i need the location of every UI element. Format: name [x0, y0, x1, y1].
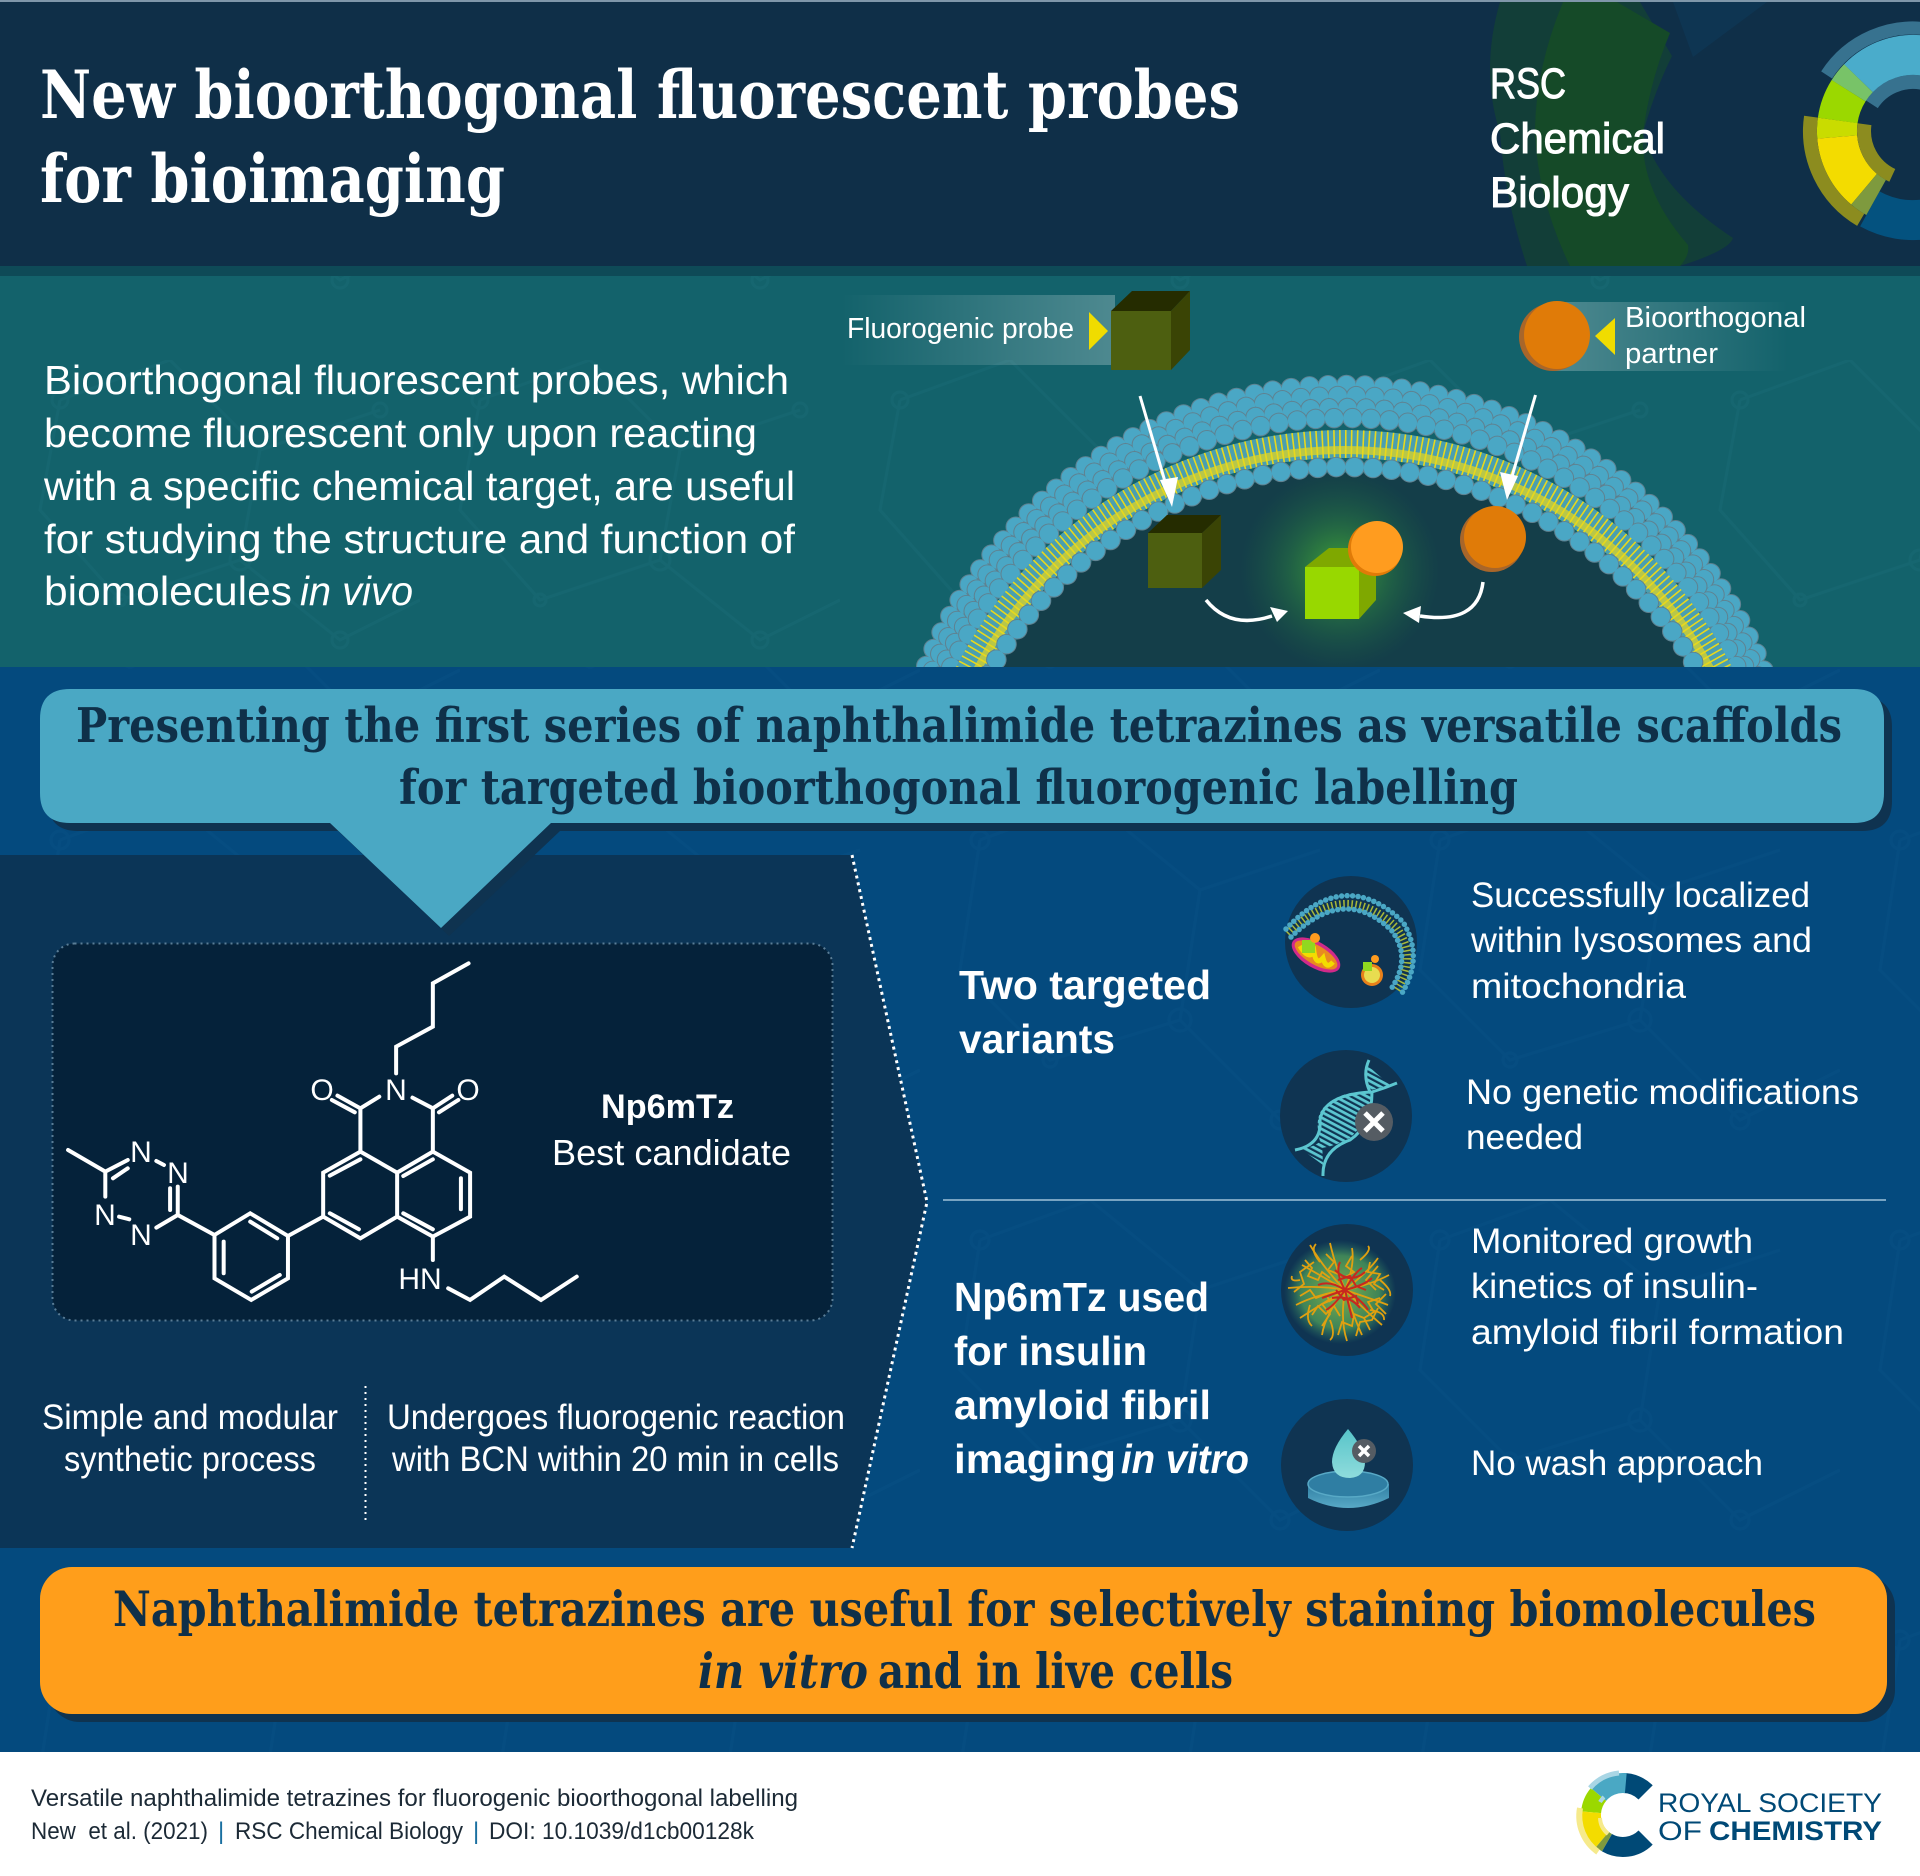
icon: partner sphere: [1519, 301, 1590, 371]
heading: insulin imaging: for insulin: [954, 1328, 1147, 1374]
text: growth kinetics: [1471, 1222, 1844, 1352]
journal name: Biology: [1490, 169, 1629, 217]
compound name: Best candidate: [552, 1132, 791, 1173]
text: synthesis: synthetic process: [64, 1440, 316, 1479]
intro text: become fluorescent only upon reacting: [44, 410, 757, 456]
header band: [0, 0, 1920, 266]
intro text: biomolecules: [44, 568, 292, 614]
conclusion banner: [40, 1567, 1895, 1722]
label: bioorthogonal partner: Bioorthogonal: [1625, 302, 1806, 334]
journal name: RSC: [1490, 60, 1566, 108]
left column: [0, 855, 927, 1548]
text: genetic modifications: No genetic modifications: [1466, 1073, 1859, 1112]
text: localization: mitochondria: [1471, 967, 1687, 1006]
citation: |: [473, 1818, 479, 1845]
text: synthesis: [42, 1398, 338, 1479]
right column: insulin amyloid: [954, 1222, 1844, 1531]
inner lipid leaflet: [981, 457, 1704, 667]
text: growth kinetics: amyloid fibril formation: [1471, 1313, 1844, 1352]
arrow: partner enters cell: [1500, 395, 1536, 500]
molecular structure: O: [310, 1074, 334, 1107]
citation: New et al. (2021): [31, 1818, 208, 1845]
right column: targeted variants: [959, 876, 1859, 1182]
icon: journal logo ring: [1810, 28, 1920, 220]
icon: inner probe cube: [1148, 515, 1221, 588]
logo: Royal Society of Chemistry: [1579, 1773, 1882, 1852]
conclusion banner: in vitro: [698, 1642, 868, 1700]
heading: insulin imaging: Np6mTz used: [954, 1274, 1209, 1320]
text: genetic modifications: needed: [1466, 1118, 1583, 1157]
text: localization: Successfully localized: [1471, 876, 1810, 915]
logo: Royal Society of Chemistry: OF: [1658, 1816, 1702, 1846]
speech banner: for targeted bioorthogonal fluorogenic labelling: [399, 760, 1518, 816]
heading: two targeted variants: [959, 962, 1211, 1062]
citation: [31, 1785, 798, 1845]
molecular structure: HN: [398, 1263, 442, 1296]
panel: main findings: [0, 667, 1920, 1752]
icon: fluorescent product: [1305, 521, 1403, 619]
label: fluorogenic probe: Fluorogenic probe: [847, 313, 1074, 345]
molecule box: [52, 944, 832, 1320]
logo: Royal Society of Chemistry: ROYAL SOCIETY: [1658, 1788, 1882, 1818]
molecular structure: N: [385, 1074, 407, 1107]
text: reaction: with BCN within 20 min in cells: [391, 1440, 839, 1479]
compound name: Np6mTz: [601, 1088, 734, 1126]
intro text: for studying the structure and function of: [44, 516, 796, 562]
heading: insulin imaging: [954, 1274, 1249, 1482]
outer lipid leaflet: [916, 374, 1773, 667]
arrow: partner reacts: [1403, 582, 1483, 623]
speech banner: [40, 689, 1892, 936]
heading: insulin imaging: amyloid fibril: [954, 1382, 1211, 1428]
lipid tails: [956, 430, 1732, 667]
icon: lysosome and mitochondria: [1285, 876, 1417, 1008]
icon: inner partner sphere: [1460, 506, 1526, 572]
citation: |: [218, 1818, 224, 1845]
conclusion banner: and in live cells: [878, 1642, 1233, 1700]
heading: insulin imaging: in vitro: [1121, 1436, 1249, 1482]
icon: amyloid fibrils: [1281, 1224, 1413, 1356]
citation: RSC Chemical Biology: [235, 1818, 463, 1845]
text: reaction: [387, 1398, 845, 1479]
molecular structure: [68, 963, 577, 1300]
text: genetic modifications: [1466, 1073, 1859, 1157]
heading: insulin imaging: imaging: [954, 1436, 1116, 1482]
title: New bioorthogonal fluorescent probes: [40, 56, 1240, 134]
logo: Royal Society of Chemistry: CHEMISTRY: [1709, 1816, 1882, 1846]
molecular structure: N: [167, 1157, 189, 1190]
intro text: with a specific chemical target, are useful: [43, 463, 795, 509]
arrow: probe reacts: [1206, 600, 1288, 622]
text: localization: [1470, 876, 1812, 1006]
intro text: [43, 357, 796, 614]
label: bioorthogonal partner: partner: [1625, 338, 1718, 370]
intro text: Bioorthogonal fluorescent probes, which: [44, 357, 789, 403]
watermark logo arcs: [1490, 2, 1767, 266]
text: localization: within lysosomes and: [1470, 921, 1812, 960]
text: growth kinetics: kinetics of insulin-: [1471, 1267, 1758, 1306]
molecular structure: N: [130, 1219, 152, 1252]
citation: Versatile naphthalimide tetrazines for fluorogenic bioorthogonal labelling: [31, 1785, 798, 1812]
panel: introduction: [0, 266, 1920, 667]
journal name: Chemical: [1490, 115, 1665, 163]
arrow: probe enters cell: [1140, 396, 1178, 507]
text: growth kinetics: Monitored growth: [1471, 1222, 1753, 1261]
molecular structure: N: [94, 1199, 116, 1232]
text: reaction: Undergoes fluorogenic reaction: [387, 1398, 845, 1437]
intro text: in vivo: [300, 568, 413, 614]
cell membrane diagram: [916, 374, 1773, 667]
journal name: [1490, 60, 1665, 217]
title: for bioimaging: [40, 140, 505, 218]
molecular structure: N: [130, 1136, 152, 1169]
icon: no wash dish: [1281, 1399, 1413, 1531]
label: fluorogenic probe: [841, 291, 1190, 370]
molecular structure: O: [456, 1074, 480, 1107]
icon: DNA crossed out: [1280, 1050, 1412, 1182]
compound name: [552, 1088, 791, 1173]
title: [40, 56, 1240, 218]
label: bioorthogonal partner: [1519, 301, 1806, 371]
citation: DOI: 10.1039/d1cb00128k: [489, 1818, 755, 1845]
text: synthesis: Simple and modular: [42, 1398, 338, 1437]
footer: [0, 1752, 1920, 1876]
text: no wash: No wash approach: [1471, 1444, 1763, 1483]
heading: two targeted variants: variants: [959, 1016, 1115, 1062]
heading: two targeted variants: Two targeted: [959, 962, 1211, 1008]
icon: probe cube: [1111, 291, 1190, 370]
